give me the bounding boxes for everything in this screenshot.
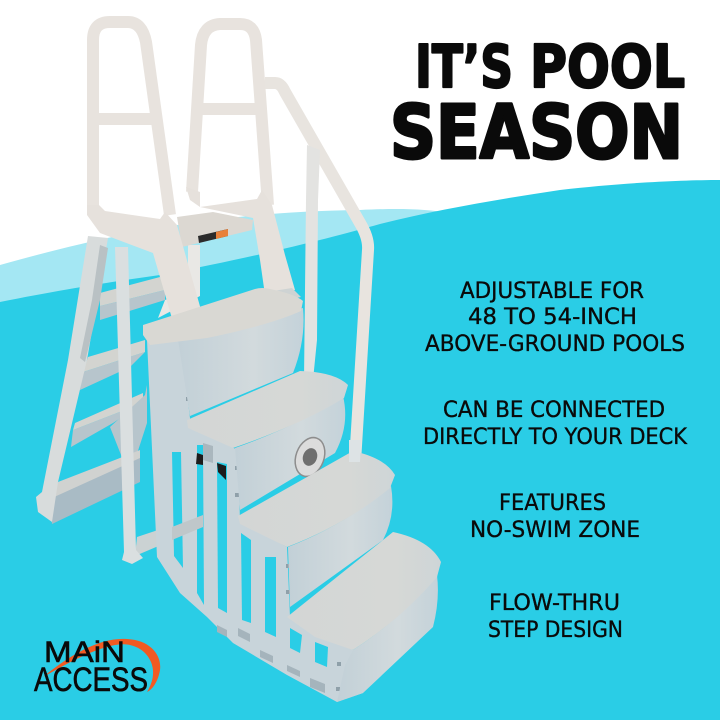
right pole foot on step 3 [349,440,361,462]
feature: deck connection: CAN BE CONNECTED [443,398,665,423]
step frame [147,336,363,702]
logo: Main Access: ACCESS [34,661,148,699]
feature: adjustable: ADJUSTABLE FOR [460,279,644,304]
feature: flow-thru: FLOW-THRU [489,591,620,616]
side holes [186,369,341,691]
feature: deck connection [423,398,688,450]
feature: no-swim zone: NO-SWIM ZONE [470,518,640,543]
title: SEASON [390,90,683,176]
feature: no-swim zone: FEATURES [499,491,606,516]
side handrail [265,83,368,462]
ladder base [50,455,140,524]
feature: flow-thru: STEP DESIGN [488,618,623,643]
warning label [198,229,228,243]
cyan water wave [0,180,720,720]
feature: no-swim zone [470,491,640,543]
hinge and latches [203,443,213,463]
logo: Main Access: MAiN [44,636,125,669]
step 1 [143,288,304,416]
title: IT’S [415,32,513,101]
feature: adjustable [425,279,685,357]
pool ladder illustration [36,22,441,702]
ladder rungs [71,290,165,447]
lower vents [217,625,325,693]
left support pole [115,247,143,564]
feature: deck connection: DIRECTLY TO YOUR DECK [423,425,688,450]
right handle [186,24,301,301]
feature list [423,279,688,643]
feature: adjustable: ABOVE-GROUND POOLS [425,332,685,357]
ladder leg [36,236,108,522]
ladder foot bar [135,515,203,556]
skimmer fitting [290,433,330,481]
flow-thru openings [172,445,328,667]
feature: flow-thru [488,591,623,643]
back ladder [36,236,203,556]
crossbar behind openings [172,515,203,540]
platform [158,212,253,318]
feature: adjustable: 48 TO 54-INCH [468,305,637,330]
logo swoosh [43,639,160,692]
title [390,32,685,176]
left handle [87,22,212,335]
logo: Main Access [34,636,160,699]
step 2 [187,371,348,510]
step 4 [287,532,441,702]
title: POOL [530,32,685,101]
step 3 [238,451,395,607]
light wave [0,209,450,400]
